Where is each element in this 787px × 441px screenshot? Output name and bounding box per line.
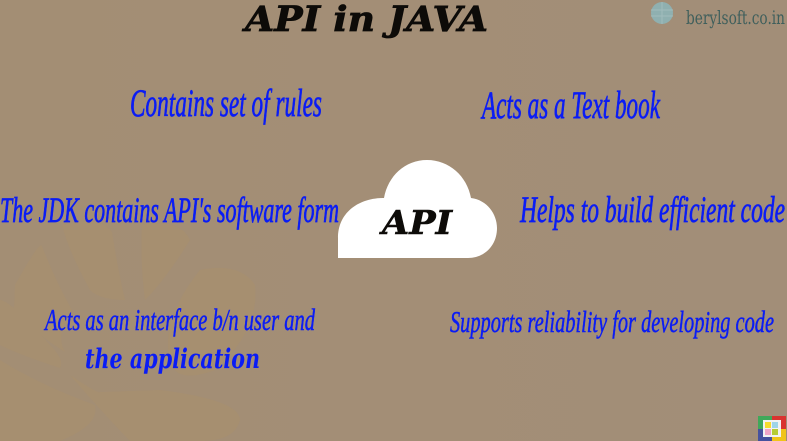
website badge — [651, 2, 785, 29]
text: interface between user and application: the application — [85, 344, 260, 375]
text: interface between user and application — [44, 302, 315, 375]
cloud with API label — [338, 160, 497, 258]
icon: globe — [651, 2, 673, 24]
text: JDK contains software form: The JDK contains API's software form — [0, 190, 339, 230]
icon: logo — [758, 416, 786, 441]
text: contains set of rules: Contains set of rules — [130, 82, 322, 125]
text: acts as a text book: Acts as a Text book — [480, 84, 660, 127]
text: interface between user and application: Acts as an interface b/n user and — [44, 302, 315, 337]
title: API in JAVA — [242, 0, 488, 40]
icon: cloud — [338, 160, 497, 258]
cloud label: API — [379, 203, 454, 242]
